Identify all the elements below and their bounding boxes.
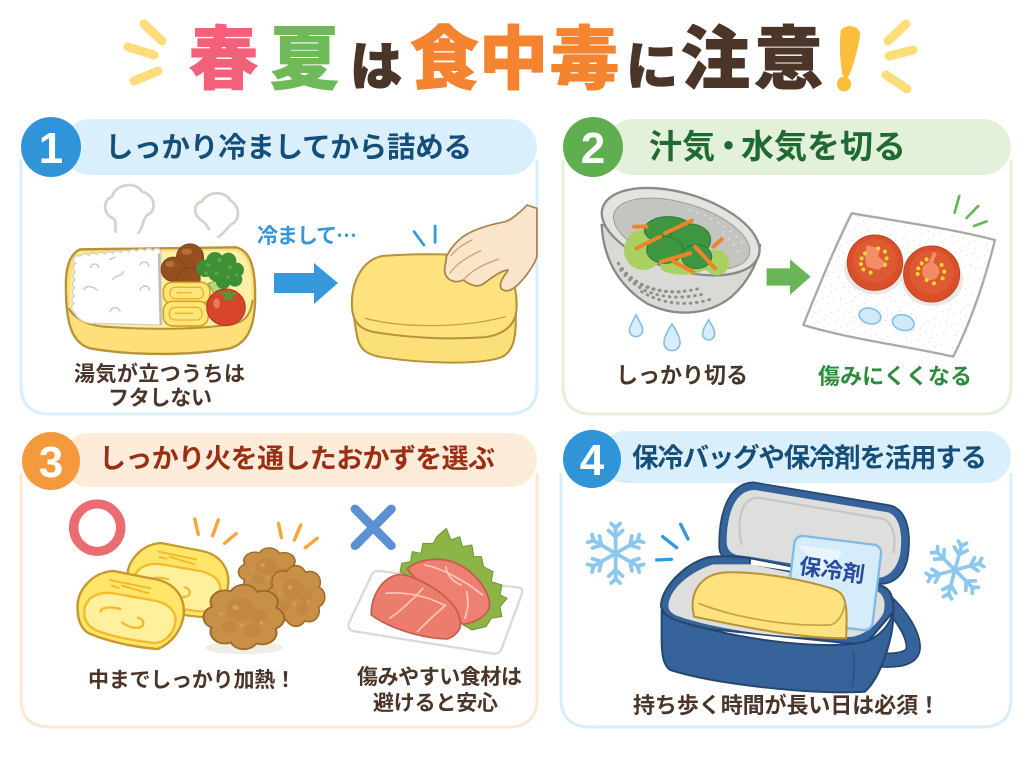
heading text: ・ [712, 128, 745, 165]
panel frame [561, 473, 1011, 727]
title text: 春 [189, 21, 258, 98]
caption: avoid perishables [357, 666, 522, 715]
title rays right [886, 24, 913, 89]
caption: less spoilage: 傷みにくくなる [818, 364, 972, 389]
illustration: colander and towel [591, 171, 995, 357]
title text: は [350, 39, 402, 97]
number badge 1: 1 [39, 124, 63, 173]
heading text: 保冷バッグや保冷剤を活用する [632, 443, 987, 473]
caption: drain: しっかり切る [616, 363, 748, 388]
icon: strap [880, 598, 913, 660]
number badge 4 [563, 430, 621, 488]
label: cool down: 冷まして… [257, 220, 357, 250]
heading pill [605, 119, 1011, 175]
vegetables [624, 217, 729, 275]
panel frame [21, 160, 537, 414]
number badge 2: 2 [581, 124, 605, 173]
number badge 3 [22, 432, 80, 490]
illustration: closed lunch box with hand [352, 205, 537, 363]
icon: snowflake right [920, 535, 990, 605]
icon: cross mark [355, 509, 391, 546]
icon: water spots [857, 306, 916, 333]
title text: 食 [410, 21, 479, 98]
icon: ice pack [785, 535, 882, 631]
caption: steam: 湯気が立つうちは [74, 362, 245, 386]
icon: steam [105, 185, 238, 237]
title text: 毒 [550, 21, 619, 98]
icon: paper towel [803, 213, 995, 357]
title text: 夏 [270, 21, 339, 98]
caption: avoid perishables: 避けると安心 [373, 692, 498, 715]
meatballs [161, 244, 203, 290]
icon: colander [591, 171, 770, 313]
number badge 4: 4 [580, 436, 605, 485]
heading pill [62, 433, 537, 487]
title rays left [128, 24, 162, 81]
icon: closed lunch box [352, 254, 517, 363]
illustration: cooler bag [586, 482, 990, 692]
caption: cook through: 中までしっかり加熱！ [88, 669, 296, 692]
icon: hand [445, 205, 537, 291]
heading text: しっかり冷ましてから詰める [105, 132, 472, 164]
icon: sparkle marks [657, 524, 688, 560]
illustration: good and bad foods [74, 504, 522, 654]
panel: step 1 [21, 117, 537, 414]
heading pill [600, 431, 1011, 483]
caption: avoid perishables: 傷みやすい食材は [357, 666, 522, 689]
tomato [207, 287, 245, 326]
icon: bag front [662, 609, 893, 692]
panel: step 3 [21, 432, 537, 727]
panel frame [563, 160, 1011, 414]
title text: 意 [754, 21, 823, 98]
icon: sparkle marks [955, 196, 987, 226]
broccoli [196, 252, 244, 298]
panel: step 4 [561, 430, 1011, 727]
number badge 2 [563, 117, 623, 177]
icon: bag lid [719, 482, 909, 584]
exclamation mark [837, 26, 860, 92]
icon: tomato halves [844, 235, 963, 306]
caption: long days: 持ち歩く時間が長い日は必須！ [633, 693, 940, 718]
heading text: 水気を切る [741, 128, 906, 165]
heading pill [62, 119, 537, 175]
caption: steam [74, 362, 245, 410]
title text: 注 [681, 21, 750, 98]
icon: press marks [414, 226, 435, 245]
icon: snowflake left [586, 524, 645, 583]
arrow: green [767, 259, 811, 295]
icon: tamagoyaki [77, 543, 228, 649]
icon: karaage [202, 547, 326, 654]
number badge 3: 3 [39, 438, 63, 487]
icon: sparkle marks [195, 519, 317, 548]
rice [72, 249, 162, 325]
icon: sashimi plate [348, 528, 522, 654]
panel frame [21, 473, 537, 727]
icon: lunch box [693, 572, 847, 638]
icon: bag interior [668, 564, 885, 638]
arrow: blue [274, 263, 338, 304]
label: ice pack: 保冷剤 [798, 554, 866, 587]
icon: circle mark [74, 504, 121, 551]
icon: water drops [629, 315, 715, 351]
caption: steam: フタしない [108, 387, 212, 410]
title [128, 21, 913, 98]
title text: に [626, 39, 678, 97]
number badge 1 [21, 117, 81, 177]
tamagoyaki [163, 282, 210, 326]
heading text: しっかり火を通したおかずを選ぶ [99, 444, 495, 474]
heading text: 汁気 [649, 128, 715, 165]
panel: step 2 [563, 117, 1011, 414]
title text: 中 [479, 21, 548, 98]
icon: bag rear rim [661, 556, 893, 645]
icon: bento box [66, 244, 255, 354]
